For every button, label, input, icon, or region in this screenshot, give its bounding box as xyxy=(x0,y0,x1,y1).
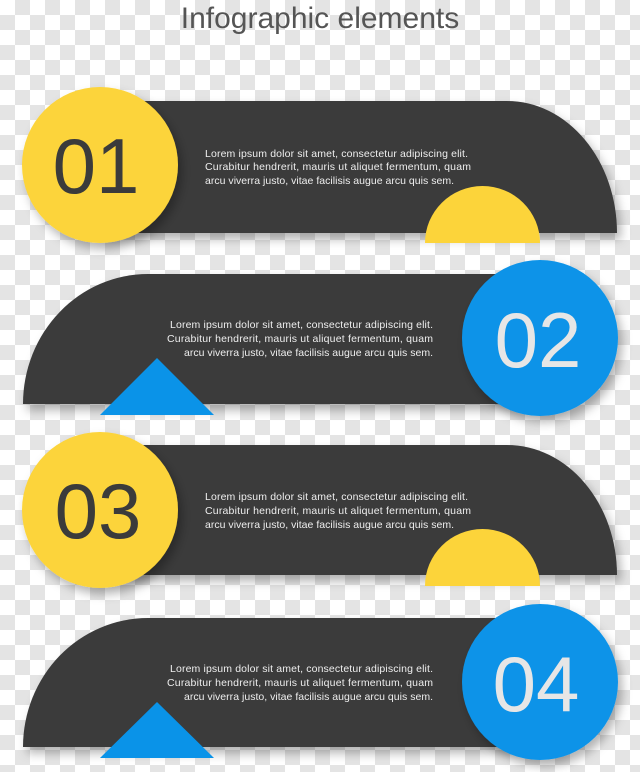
text block 04: arcu viverra justo, vitae facilisis augue arcu quis sem. xyxy=(184,691,433,703)
text block 03: Curabitur hendrerit, mauris ut aliquet fermentum, quam xyxy=(205,505,471,517)
panel: 02 xyxy=(23,260,618,416)
badge: 04: 04 xyxy=(493,640,579,728)
badge: 04 xyxy=(462,604,618,760)
panel: 01 xyxy=(22,87,617,243)
text block 04: Curabitur hendrerit, mauris ut aliquet fermentum, quam xyxy=(167,677,433,689)
text block 03 xyxy=(205,491,471,531)
badge: 02 xyxy=(462,260,618,416)
icon: yellow semicircle 03 xyxy=(425,529,540,586)
badge: 01: 01 xyxy=(53,122,139,210)
text block 03: arcu viverra justo, vitae facilisis augue arcu quis sem. xyxy=(205,519,454,531)
text block 03: Lorem ipsum dolor sit amet, consectetur adipiscing elit. xyxy=(205,491,468,503)
icon: blue triangle 04 xyxy=(100,702,214,758)
badge: 03 xyxy=(22,432,178,588)
badge: 02: 02 xyxy=(495,296,581,384)
icon: blue triangle 02 xyxy=(100,358,214,415)
text block 04: Lorem ipsum dolor sit amet, consectetur adipiscing elit. xyxy=(170,663,433,675)
text block 01: Curabitur hendrerit, mauris ut aliquet fermentum, quam xyxy=(205,161,471,173)
text block 04 xyxy=(167,663,433,703)
text block 02: Curabitur hendrerit, mauris ut aliquet fermentum, quam xyxy=(167,333,433,345)
title: Infographic elements xyxy=(181,2,459,35)
text block 01: arcu viverra justo, vitae facilisis augue arcu quis sem. xyxy=(205,175,454,187)
text block 01: Lorem ipsum dolor sit amet, consectetur adipiscing elit. xyxy=(205,148,468,160)
text block 01 xyxy=(205,148,471,187)
panel: 03 xyxy=(22,432,617,588)
badge: 03: 03 xyxy=(55,467,141,555)
icon: yellow semicircle 01 xyxy=(425,186,540,243)
text block 02: Lorem ipsum dolor sit amet, consectetur adipiscing elit. xyxy=(170,319,433,331)
text block 02 xyxy=(167,319,433,359)
panel: 04 xyxy=(23,604,618,760)
text block 02: arcu viverra justo, vitae facilisis augue arcu quis sem. xyxy=(184,347,433,359)
badge: 01 xyxy=(22,87,178,243)
